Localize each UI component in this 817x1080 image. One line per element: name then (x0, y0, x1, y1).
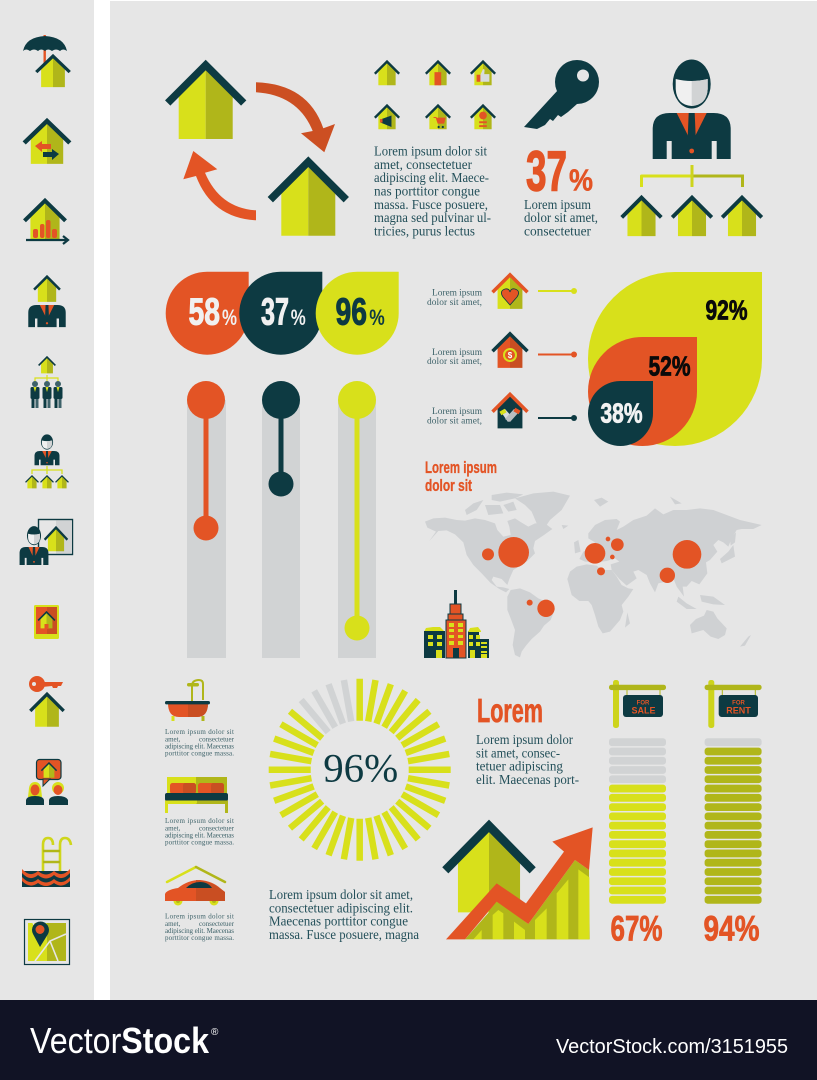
text: key caption (524, 197, 598, 238)
legend row: heart house: Lorem ipsum (432, 289, 483, 299)
sidebar icon: house with bar chart and arrow (24, 201, 68, 244)
legend row: handshake house: Lorem ipsum (432, 407, 483, 417)
sidebar icon: tablet with house (34, 605, 59, 639)
world map (425, 492, 762, 657)
footer bar: VectorStock.com/3151955 (556, 1036, 788, 1058)
text: bed caption: adipiscing elit. Maecenas (165, 831, 234, 839)
sidebar icon: two people discussing a house (26, 760, 68, 805)
sidebar icon: manager with three houses (26, 434, 68, 488)
legend row: dollar house: dolor sit amet, (427, 357, 482, 367)
footer bar: ® (211, 1027, 219, 1038)
stat: 67%: 67% (610, 910, 662, 948)
text: bed caption: porttitor congue massa. (165, 839, 234, 847)
icon: key (524, 60, 599, 129)
stat: 94%: 94% (704, 910, 760, 948)
paragraph: top: amet, consectetuer (374, 157, 473, 172)
legend row: dollar house: Lorem ipsum (432, 348, 483, 358)
legend row: dollar house (427, 334, 577, 368)
paragraph: top: nas porttitor congue (374, 184, 480, 198)
sidebar icon: swimming pool (22, 838, 71, 887)
nested drop chart (588, 272, 762, 446)
legend row: dollar house: $ (508, 351, 513, 360)
text: bed caption: amet, (165, 824, 181, 832)
sign: for sale: FOR (637, 700, 650, 706)
drop: 37%: % (291, 305, 306, 330)
paragraph: top: adipiscing elit. Maece- (374, 170, 489, 185)
footer bar: VectorStock (30, 1020, 210, 1061)
paragraph: below radial chart: Lorem ipsum dolor sit amet, (269, 887, 413, 902)
drop: 37% (239, 272, 322, 355)
drop: 58%: 58 (188, 292, 220, 334)
text: bathtub caption: Lorem ipsum dolor sit (165, 728, 234, 736)
slider: orange (187, 381, 226, 658)
paragraph: right column: elit. Maecenas port- (476, 772, 579, 787)
text: bathtub caption: adipiscing elit. Maecenas (165, 742, 234, 750)
slider: dark (262, 381, 300, 658)
paragraph: below radial chart: consectetuer adipiscing elit. (269, 900, 413, 915)
bar stack: for rent (705, 738, 762, 904)
text: bed caption: Lorem ipsum dolor sit (165, 817, 234, 825)
text: key caption: consectetuer (524, 224, 592, 238)
small house icon grid (375, 62, 495, 129)
text: bathtub caption (165, 728, 235, 758)
paragraph: top: tricies, purus lectus (374, 224, 475, 238)
sidebar icon: agent presenting a house (20, 520, 72, 565)
paragraph: right column (476, 732, 579, 787)
paragraph: right column: Lorem ipsum dolor (476, 732, 574, 747)
map heading (425, 458, 497, 495)
sign: for rent: RENT (726, 706, 751, 716)
text: car caption: porttitor congue massa. (165, 934, 234, 942)
drop: 96% (316, 272, 399, 355)
org chart: manager and three houses (622, 60, 762, 236)
legend row: handshake house (427, 394, 577, 428)
icon: bathtub (165, 680, 210, 721)
paragraph: below radial chart: Maecenas porttitor congue (269, 914, 408, 929)
text: bed caption: consectetuer (199, 824, 235, 832)
text: car caption: adipiscing elit. Maecenas (165, 927, 234, 935)
sidebar icon: map with pin (24, 920, 70, 964)
drop: 58% (166, 272, 249, 355)
map heading: Lorem ipsum (425, 458, 497, 477)
drop: 96%: % (369, 305, 385, 330)
sidebar icon: agent with house head (28, 277, 66, 327)
nested drop chart: 92% (706, 294, 748, 326)
big house cycle with arrows (168, 65, 346, 236)
text: key caption: Lorem ipsum (524, 197, 592, 212)
radial chart: 96% (269, 679, 451, 861)
sidebar icon: umbrella over house (23, 35, 70, 87)
drop: 58%: % (222, 305, 237, 330)
paragraph: top: massa. Fusce posuere, (374, 197, 488, 212)
text: car caption (165, 912, 235, 942)
sidebar icon: house with exchange arrows (24, 121, 70, 164)
sidebar icon: house above three people (30, 357, 62, 408)
text: key caption: dolor sit amet, (524, 210, 598, 225)
radial chart: 96%: 96% (323, 746, 398, 791)
house with rising arrow chart (445, 826, 593, 939)
icon: bed (165, 777, 228, 813)
paragraph: right column: sit amet, consec- (476, 745, 560, 760)
stat: 37%: 37 (526, 140, 567, 204)
map heading: dolor sit (425, 476, 472, 495)
heading: Lorem: Lorem (477, 692, 543, 729)
paragraph: top (374, 144, 491, 238)
stat: 37%: % (569, 162, 593, 198)
legend row: handshake house: dolor sit amet, (427, 416, 482, 426)
drop: 96%: 96 (336, 292, 367, 334)
text: car caption: consectetuer (199, 920, 235, 928)
text: bathtub caption: porttitor congue massa. (165, 750, 234, 758)
bar stack: for sale (609, 738, 666, 904)
slider: lime (338, 381, 376, 658)
legend row: heart house: dolor sit amet, (427, 298, 482, 308)
sign: for sale (609, 680, 666, 728)
sign: for rent: FOR (732, 700, 745, 706)
footer bar (0, 1000, 817, 1080)
paragraph: below radial chart (269, 887, 419, 942)
legend row: heart house (427, 275, 577, 309)
text: bed caption (165, 817, 235, 847)
sidebar icon: key over house (29, 676, 64, 727)
sign: for rent (705, 680, 762, 728)
drop: 37%: 37 (261, 292, 289, 334)
text: bathtub caption: amet, (165, 735, 181, 743)
paragraph: top: Lorem ipsum dolor sit (374, 144, 487, 158)
icon: car in garage (165, 867, 225, 906)
text: car caption: Lorem ipsum dolor sit (165, 912, 234, 920)
sign: for sale: SALE (631, 706, 656, 716)
paragraph: below radial chart: massa. Fusce posuere, magna (269, 927, 419, 942)
paragraph: top: magna sed pulvinar ul- (374, 210, 491, 225)
icon: city buildings (424, 590, 489, 658)
paragraph: right column: tetuer adipiscing (476, 759, 563, 774)
text: bathtub caption: consectetuer (199, 735, 235, 743)
nested drop chart: 38% (600, 398, 643, 428)
text: car caption: amet, (165, 920, 181, 928)
nested drop chart: 52% (648, 350, 691, 382)
